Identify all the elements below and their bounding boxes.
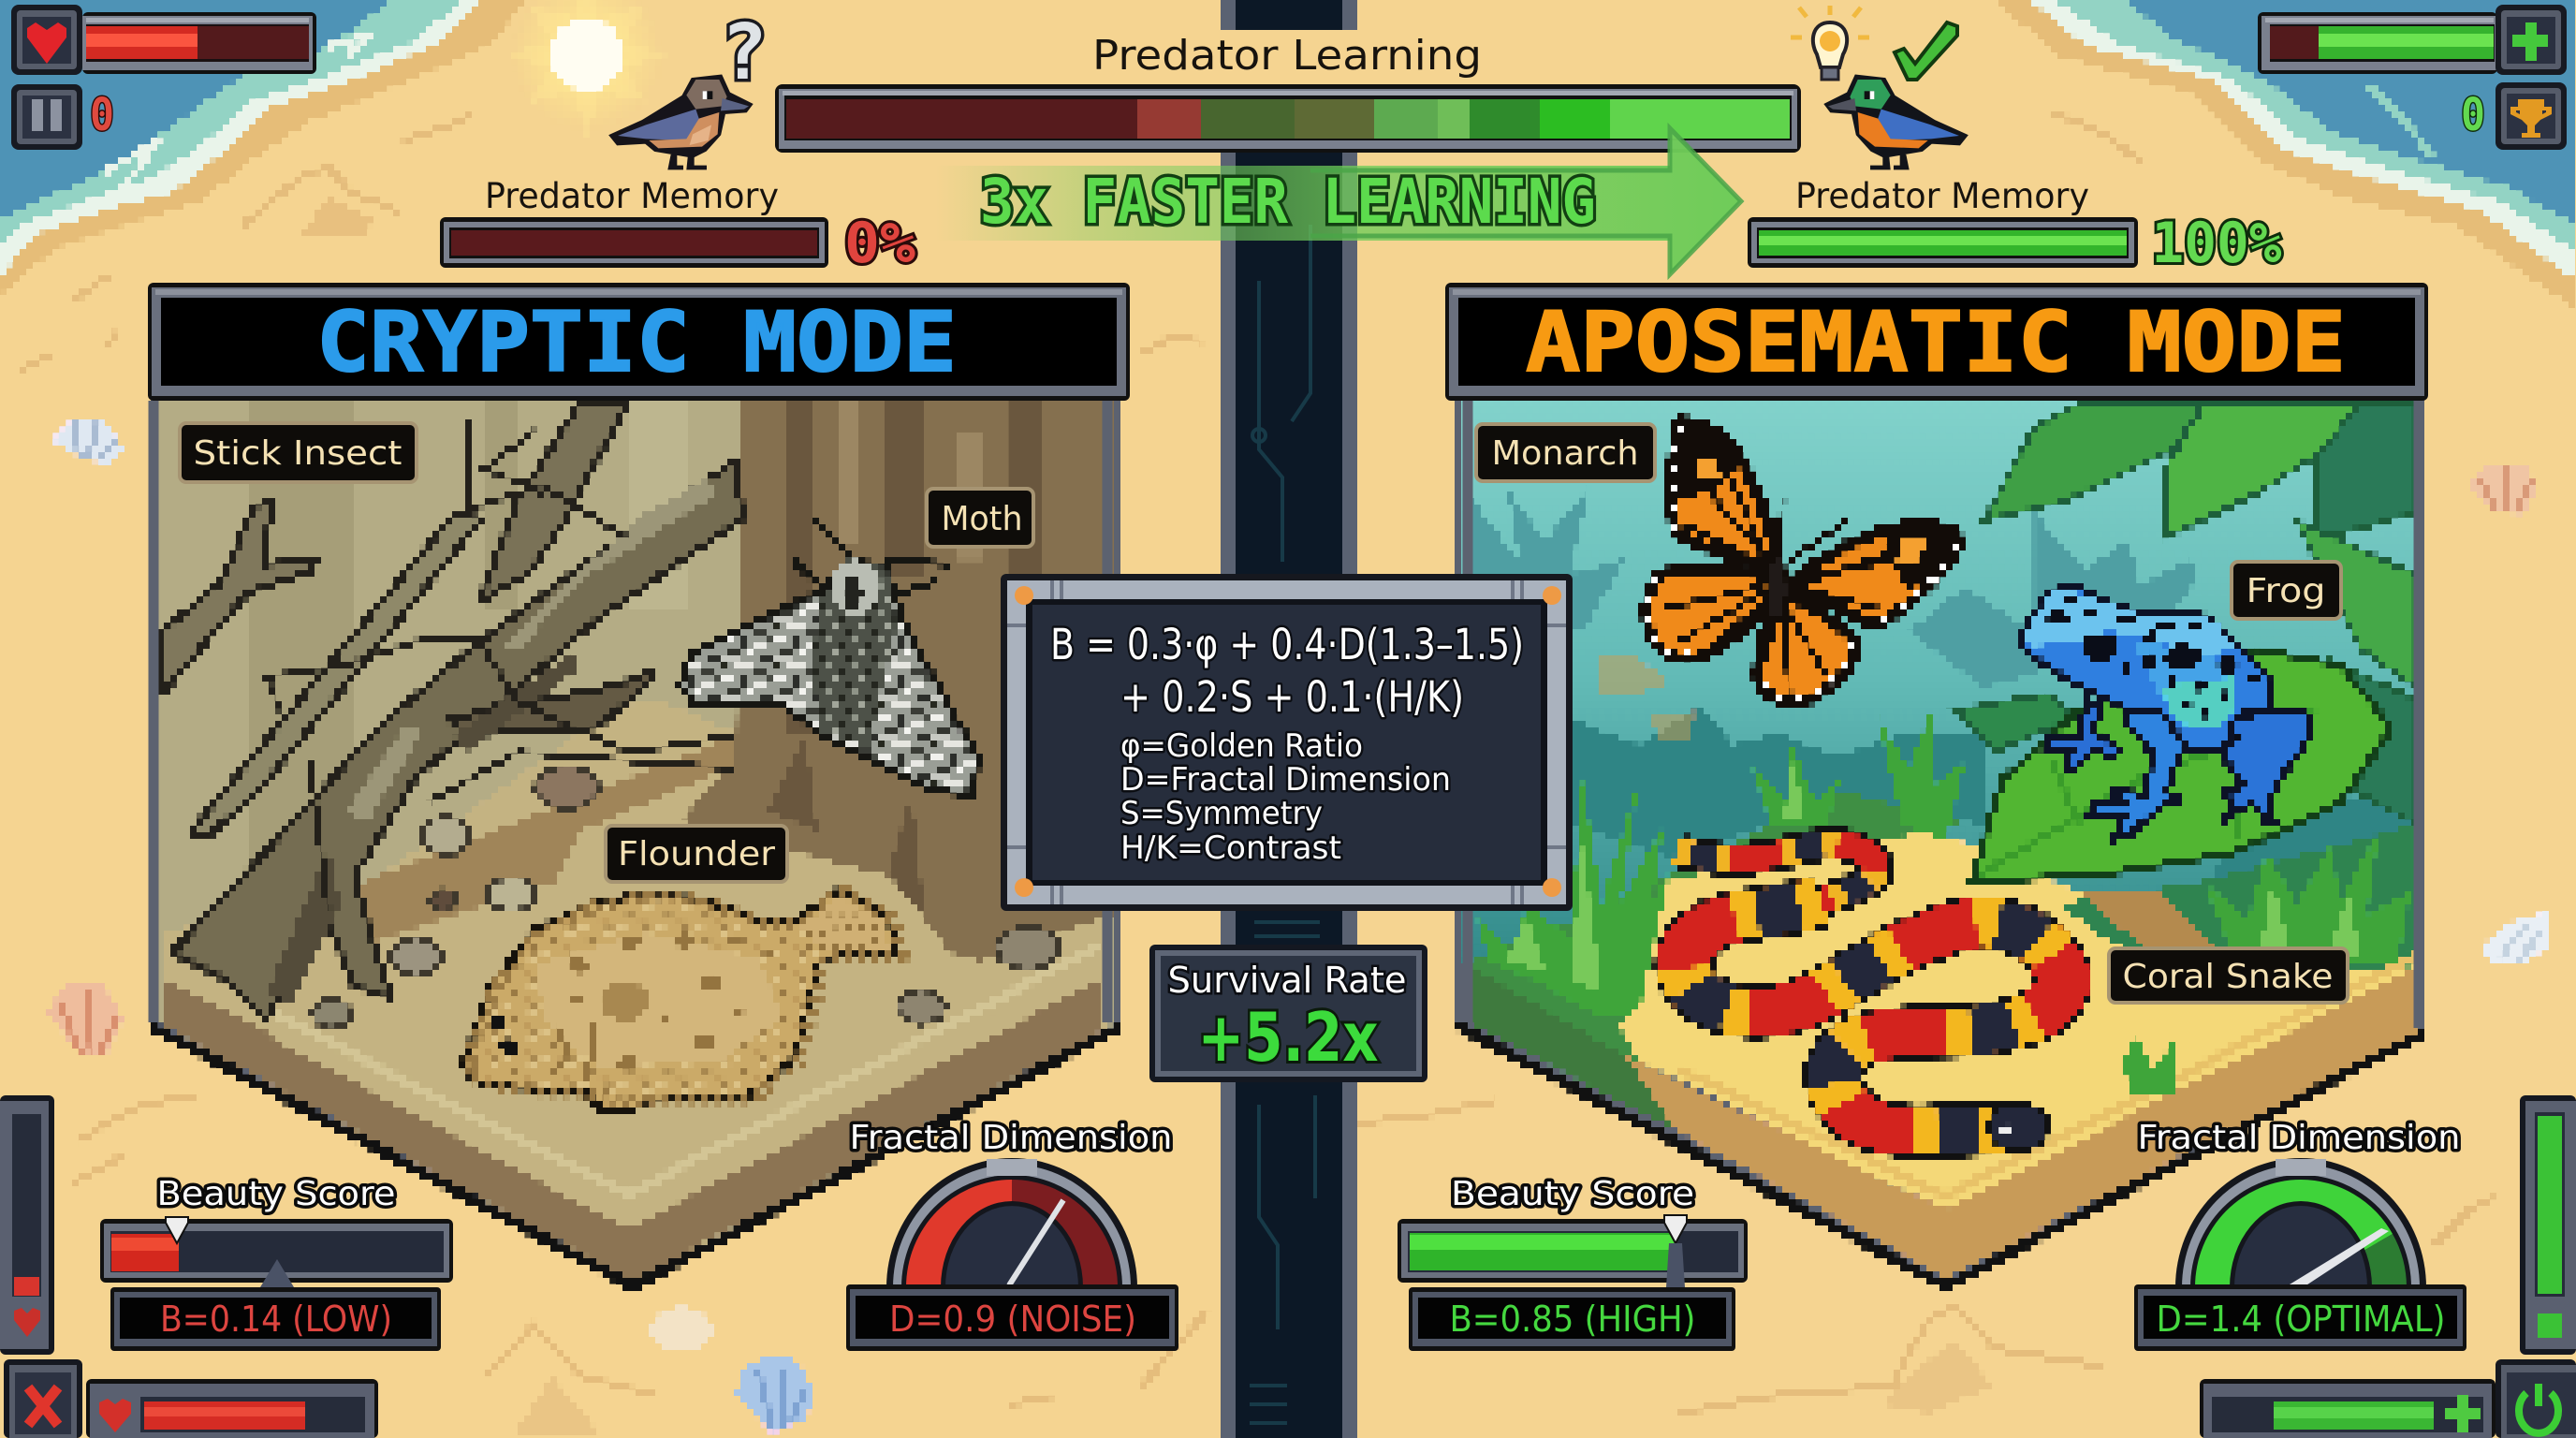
label: monarch xyxy=(1476,424,1655,481)
sea: top right xyxy=(1994,0,2576,309)
label: monarch: Monarch xyxy=(1492,434,1638,473)
HUD: bottom left bar xyxy=(4,1359,378,1438)
bar xyxy=(440,217,828,268)
meter: aposematic fractal dimension xyxy=(2134,1119,2466,1351)
rivets xyxy=(1015,586,1561,897)
shell: peach right xyxy=(2467,463,2539,515)
grass clumps xyxy=(1476,711,2410,1096)
arrow label: 3x FASTER LEARNING xyxy=(980,166,1596,238)
label: frog: Frog xyxy=(2247,572,2325,610)
value: B=0.14 (LOW) xyxy=(160,1299,392,1340)
label: moth xyxy=(927,489,1033,547)
icon: small heart xyxy=(99,1399,131,1432)
counter: left: 0 xyxy=(90,89,114,141)
value: 100% xyxy=(2151,211,2282,276)
sun xyxy=(505,0,669,140)
monarch butterfly xyxy=(1647,421,1959,703)
central circuit column xyxy=(1221,0,1357,1438)
icon: plus button xyxy=(2496,5,2567,75)
callout: survival rate: Survival Rate xyxy=(1168,960,1406,1001)
panel frame: cryptic xyxy=(154,401,1107,1022)
flounder body xyxy=(463,889,898,1114)
bar xyxy=(1398,1215,1748,1287)
label: Beauty Score xyxy=(1451,1175,1694,1213)
arrow: 3x faster learning xyxy=(936,128,1741,274)
meter: cryptic beauty score xyxy=(100,1175,453,1351)
frog leaf xyxy=(1971,649,2392,881)
callout: survival rate: +5.2x xyxy=(1198,998,1378,1077)
value: D=1.4 (OPTIMAL) xyxy=(2157,1299,2445,1340)
icon: question mark: ? xyxy=(721,8,768,97)
icon: lightbulb xyxy=(1791,6,1869,80)
header: aposematic mode: APOSEMATIC MODE xyxy=(1526,294,2346,390)
value: D=0.9 (NOISE) xyxy=(889,1299,1136,1340)
panel: cryptic mode xyxy=(140,283,1130,1312)
label: flounder: Flounder xyxy=(618,835,775,873)
shell: peach left xyxy=(47,983,124,1056)
meter: cryptic fractal dimension xyxy=(846,1119,1178,1351)
formula text: φ=Golden Ratio xyxy=(1120,727,1363,765)
shell: white right xyxy=(2481,913,2551,964)
icon: heart button xyxy=(11,5,82,75)
counter: right: 0 xyxy=(2461,89,2485,141)
meter: aposematic beauty score xyxy=(1398,1175,1748,1351)
panel: beauty formula xyxy=(1001,574,1573,911)
shell: white top left xyxy=(51,417,124,463)
formula text: B = 0.3·φ + 0.4·D(1.3–1.5) xyxy=(1050,620,1524,669)
memory: left xyxy=(440,176,915,276)
formula text xyxy=(1050,620,1524,867)
HUD: bottom right bar xyxy=(2200,1359,2576,1438)
coral snake xyxy=(1676,844,2062,1151)
bar xyxy=(100,1217,453,1287)
HUD: top right health xyxy=(2258,5,2567,150)
HUD: top left health xyxy=(11,5,316,150)
icon: power button xyxy=(2496,1359,2576,1438)
ground base and flounder xyxy=(162,889,1099,1283)
value: B=0.85 (HIGH) xyxy=(1449,1299,1696,1340)
label: Fractal Dimension xyxy=(2138,1119,2460,1157)
icon: trophy button xyxy=(2496,82,2567,150)
panel: aposematic mode xyxy=(1445,283,2435,1292)
icon: check mark xyxy=(1895,22,1957,80)
label: Predator Memory xyxy=(1795,176,2089,216)
value: 0% xyxy=(844,211,915,276)
scene: cryptic habitat xyxy=(140,393,1124,1312)
formula text: H/K=Contrast xyxy=(1120,829,1341,867)
callout: survival rate xyxy=(1149,945,1427,1082)
shell: cream xyxy=(651,1307,712,1352)
value xyxy=(1409,1287,1735,1351)
icon: close button xyxy=(4,1359,82,1438)
label: moth: Moth xyxy=(942,500,1022,538)
HUD: right vertical gauge xyxy=(2520,1095,2576,1355)
icon: dull predator bird xyxy=(611,77,751,169)
header: cryptic mode xyxy=(148,283,1130,401)
label: stick insect: Stick Insect xyxy=(193,434,402,473)
value xyxy=(846,1284,1178,1351)
panel frame: aposematic xyxy=(1468,401,2419,1028)
label: frog xyxy=(2232,562,2341,619)
icon: pause button xyxy=(11,84,82,150)
icon: bright predator bird xyxy=(1826,77,1966,169)
label: coral snake xyxy=(2109,948,2348,1003)
heading: predator learning: Predator Learning xyxy=(1092,32,1482,80)
sea: top left xyxy=(0,0,529,295)
label: Beauty Score xyxy=(157,1175,395,1213)
icon: small plus xyxy=(2445,1395,2481,1432)
memory: right xyxy=(1748,176,2282,276)
moth xyxy=(680,519,977,796)
gauge xyxy=(2175,1158,2426,1290)
label: stick insect xyxy=(180,423,417,482)
value xyxy=(2134,1284,2466,1351)
background leaves xyxy=(1953,404,2417,825)
value xyxy=(110,1287,441,1351)
formula text: S=Symmetry xyxy=(1120,795,1323,832)
label: Predator Memory xyxy=(485,176,779,216)
formula text: D=Fractal Dimension xyxy=(1120,761,1451,799)
bar: predator learning progress xyxy=(775,84,1801,153)
shell: blue xyxy=(735,1353,814,1434)
label: Fractal Dimension xyxy=(850,1119,1172,1157)
header: aposematic mode xyxy=(1445,283,2428,401)
label: flounder xyxy=(606,826,787,882)
HUD: left vertical gauge xyxy=(0,1095,54,1355)
poison dart frog xyxy=(2022,587,2310,840)
formula text: + 0.2·S + 0.1·(H/K) xyxy=(1120,672,1464,722)
gauge xyxy=(886,1158,1137,1287)
scene: aposematic habitat xyxy=(1451,393,2435,1292)
bar xyxy=(1748,217,2138,268)
header: cryptic mode: CRYPTIC MODE xyxy=(316,294,957,390)
label: coral snake: Coral Snake xyxy=(2123,958,2333,996)
